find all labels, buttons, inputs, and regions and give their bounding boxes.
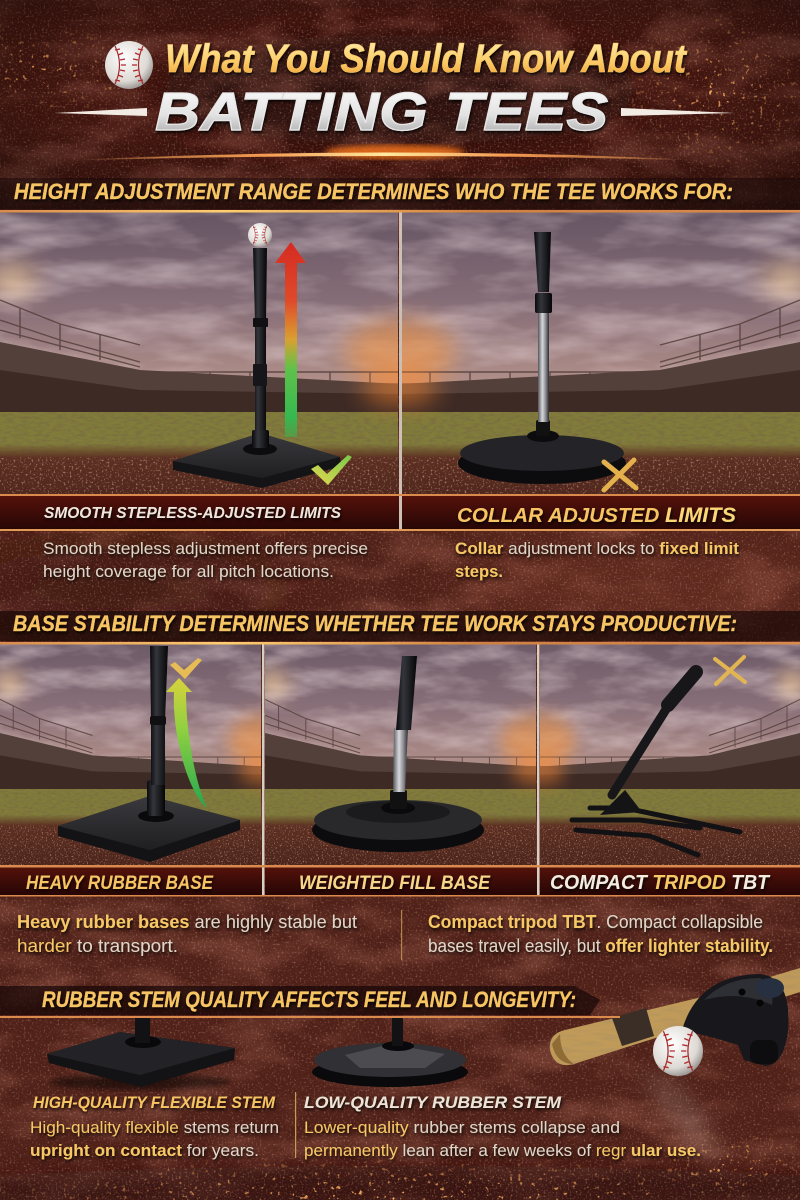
caption: collar adjusted (402, 495, 800, 530)
tee: stepless black tee (173, 248, 342, 488)
caption: smooth stepless: SMOOTH STEPLESS-ADJUSTED LIMITS (44, 505, 341, 522)
text: collar description: Collar adjustment locks to fixed limit (455, 539, 739, 558)
heading: rubber stem quality: RUBBER STEM QUALITY AFFECTS FEEL AND LONGEVITY: (42, 987, 576, 1012)
rule under heading two (0, 642, 800, 644)
text: compact tripod description: bases travel easily, but offer lighter stability. (428, 936, 773, 956)
panel: heavy rubber base photo (0, 644, 261, 865)
panel: smooth stepless tee photo (0, 212, 398, 494)
caption: weighted fill base (265, 866, 537, 895)
caption: weighted fill base: WEIGHTED FILL BASE (299, 873, 491, 894)
text: heavy rubber description: harder to transport. (17, 936, 178, 956)
scene: bat, ball and helmet (550, 968, 800, 1170)
caption: compact tripod: COMPACT TRIPOD TBT (550, 872, 771, 894)
arrow: height range (275, 242, 306, 437)
baseball (653, 1026, 703, 1076)
text: collar description (455, 539, 739, 581)
tee: collar tee (458, 232, 626, 484)
helmet (682, 974, 788, 1066)
divider between top panels (399, 210, 402, 530)
tee: compact tripod (572, 672, 740, 855)
text: heavy rubber description (17, 912, 357, 956)
text: high quality stem: upright on contact for years. (30, 1141, 259, 1160)
tee: heavy rubber base (58, 646, 240, 862)
base: round low-quality (312, 1018, 468, 1087)
text: compact tripod description (428, 912, 773, 956)
text: compact tripod description: Compact tripod TBT. Compact collapsible (428, 912, 763, 932)
caption: collar adjusted: COLLAR ADJUSTED LIMITS (457, 504, 736, 527)
panel: compact tripod photo (540, 644, 800, 865)
icon: green check (311, 455, 352, 485)
title block (55, 37, 735, 160)
rule under heading three (0, 1016, 620, 1018)
divider: descriptions (401, 910, 402, 960)
title line two: BATTING TEES (155, 82, 608, 142)
caption: heavy rubber base (0, 866, 262, 895)
title side rule right (621, 108, 735, 116)
rule under heading one (0, 210, 800, 212)
tee: weighted fill base (312, 656, 484, 852)
icon: gold X (715, 657, 745, 684)
text: collar description: steps. (455, 562, 503, 581)
divider: stem columns (295, 1092, 296, 1158)
text: smooth stepless description: height coverage for all pitch locations. (43, 562, 334, 581)
heading: height adjustment: HEIGHT ADJUSTMENT RANGE DETERMINES WHO THE TEE WORKS FOR: (14, 179, 733, 204)
text: low quality stem: permanently lean after a few weeks of regr ular use. (304, 1141, 701, 1160)
panel: collar adjusted tee photo (402, 212, 800, 494)
bat (550, 968, 800, 1065)
caption rules (0, 865, 800, 896)
icon: baseball on tee (248, 223, 272, 247)
icon: gold check (170, 658, 202, 679)
text: high quality stem: HIGH-QUALITY FLEXIBLE STEM (33, 1093, 276, 1112)
text: low quality stem (304, 1093, 701, 1160)
base: square high-quality (47, 1018, 235, 1090)
text: low quality stem: Lower-quality rubber stems collapse and (304, 1118, 620, 1137)
text: high quality stem: High-quality flexible stems return (30, 1118, 279, 1137)
text: heavy rubber description: Heavy rubber bases are highly stable but (17, 912, 357, 932)
arrow: curved stability (166, 678, 207, 808)
text: high quality stem (30, 1093, 279, 1160)
icon: baseball (105, 41, 153, 89)
dividers between middle panels (262, 642, 540, 896)
chalk smear (640, 1070, 720, 1170)
caption: heavy rubber base: HEAVY RUBBER BASE (26, 873, 214, 894)
title line one: What You Should Know About (165, 37, 688, 81)
caption: compact tripod (540, 866, 800, 895)
heading: base stability: BASE STABILITY DETERMINES WHETHER TEE WORK STAYS PRODUCTIVE: (13, 611, 737, 636)
text: low quality stem: LOW-QUALITY RUBBER STEM (304, 1093, 562, 1112)
icon: gold X (604, 460, 636, 490)
caption rules (0, 494, 800, 531)
title flare (80, 145, 690, 160)
caption: smooth stepless (0, 495, 399, 530)
text: smooth stepless description: Smooth stepless adjustment offers precise (43, 539, 368, 558)
title side rule left (55, 108, 147, 116)
panel: weighted fill base photo (265, 644, 536, 865)
text: smooth stepless description (43, 539, 368, 581)
